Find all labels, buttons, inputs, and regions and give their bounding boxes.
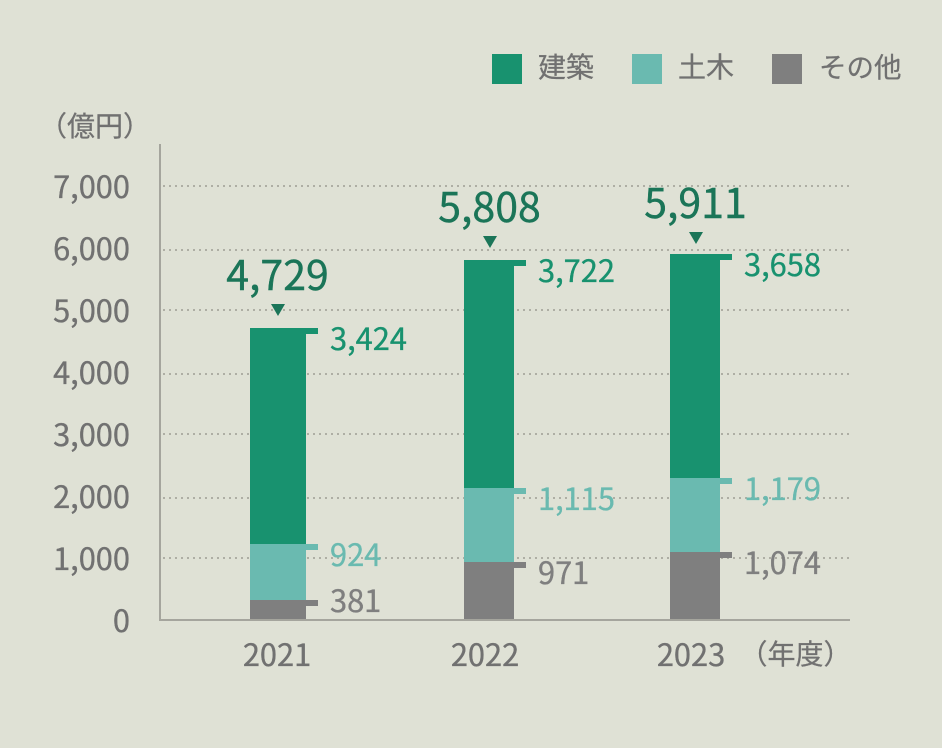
bar 2022: 3,722 [538,246,615,291]
bar 2021: 3,424 [330,314,407,359]
y axis unit: （億円） [39,105,151,145]
bar 2021: 924 [330,530,381,575]
y axis labels: 1,000 [53,534,130,579]
bar 2022: 1,115 [538,474,615,519]
bar 2021: 4,729 [226,242,329,302]
y axis labels: 7,000 [53,162,130,207]
legend: 建築 [538,46,594,86]
legend: その他 [819,45,902,85]
bar 2023: 1,179 [744,464,821,509]
y axis labels: 0 [113,596,130,641]
y axis labels: 6,000 [53,224,130,269]
bar 2023 [644,170,821,620]
x axis labels [243,630,852,675]
bar 2021: 381 [330,576,381,621]
legend [492,45,902,86]
y axis labels [53,162,130,641]
legend: 土木 [678,46,734,86]
x axis labels: （年度） [740,633,852,673]
bar 2022 [438,174,615,620]
x axis labels: 2022 [451,630,519,675]
y axis labels: 3,000 [53,410,130,455]
x axis labels: 2021 [243,630,311,675]
y axis labels: 2,000 [53,472,130,517]
bar 2021 [226,242,407,621]
bar 2023: 5,911 [644,170,747,230]
bar 2022: 971 [538,548,589,593]
axes [159,144,850,621]
bar 2023: 1,074 [744,538,821,583]
bar 2023: 3,658 [744,240,821,285]
bar 2022: 5,808 [438,174,541,234]
y axis labels: 5,000 [53,286,130,331]
x axis labels: 2023 [657,630,725,675]
y axis labels: 4,000 [53,348,130,393]
